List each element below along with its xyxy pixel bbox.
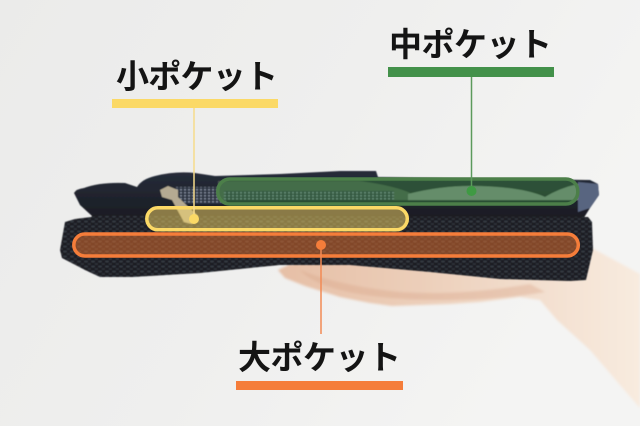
callout: small pocket highlight — [147, 108, 407, 230]
callout: medium pocket highlight — [218, 77, 578, 204]
callout: large pocket highlight — [74, 234, 578, 334]
pouch mesh lower body — [60, 216, 593, 281]
label: small pocket: 小ポケット — [116, 58, 278, 95]
zipper pull — [160, 186, 198, 224]
label: large pocket: 大ポケット — [238, 339, 401, 376]
callout dot: small pocket — [189, 214, 199, 224]
callout line: medium pocket — [470, 77, 472, 191]
callout line: small pocket — [193, 108, 195, 218]
pouch upper body — [74, 171, 599, 232]
callout line: large pocket — [320, 245, 322, 334]
photo: hand holding the pouch — [278, 240, 640, 408]
underline: medium pocket — [388, 67, 554, 77]
pouch side highlight — [578, 182, 599, 212]
underline: large pocket — [236, 381, 403, 390]
zipper teeth under the green area — [224, 191, 394, 200]
label: medium pocket: 中ポケット — [389, 26, 552, 63]
fabric band, left — [218, 181, 410, 200]
underline: small pocket — [112, 99, 278, 108]
callout dot: medium pocket — [466, 186, 476, 196]
zipper tape — [176, 187, 226, 204]
callout dot: large pocket — [316, 240, 326, 250]
photo: pouch — [60, 171, 599, 281]
fabric puffs, right — [408, 184, 578, 200]
